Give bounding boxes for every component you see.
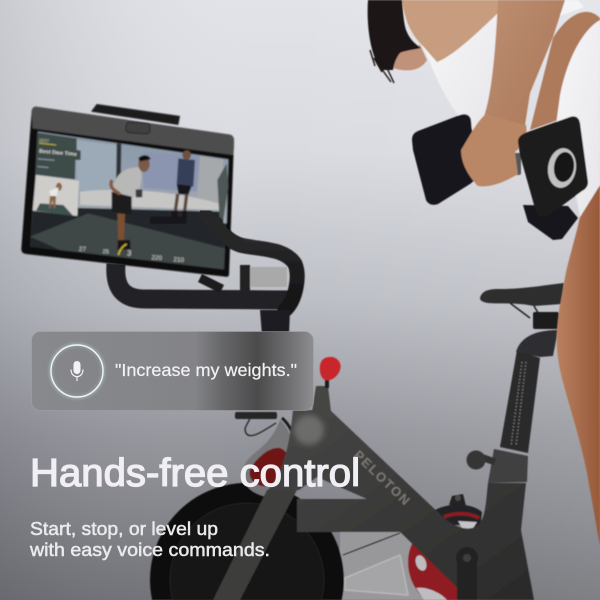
arm xyxy=(482,0,565,150)
hip skin xyxy=(530,12,600,130)
handlebar tip over tablet xyxy=(204,214,240,245)
head post and knob xyxy=(312,357,341,412)
front wheel xyxy=(150,483,344,600)
flywheel red section xyxy=(408,538,470,600)
camera button xyxy=(126,122,150,134)
left dumbbell head xyxy=(412,114,476,205)
metric: weight: 25 xyxy=(102,249,109,256)
tablet body xyxy=(21,107,234,277)
tablet xyxy=(21,104,234,277)
torso skin xyxy=(402,0,499,62)
fork xyxy=(213,484,300,600)
white top xyxy=(422,12,498,131)
studio walls xyxy=(34,132,228,223)
crank bolt xyxy=(456,547,478,600)
top shoulder strip xyxy=(560,0,584,16)
bike frame xyxy=(268,410,534,600)
tablet screen xyxy=(30,132,228,269)
microphone icon xyxy=(71,361,83,381)
metric: reps: 3 xyxy=(127,249,132,258)
workout dumbbells on floor xyxy=(150,217,187,224)
stats panel label: 1837 xyxy=(39,138,50,144)
microphone circle xyxy=(51,345,103,397)
fist xyxy=(461,114,527,186)
rear dumbbell head xyxy=(523,205,578,240)
stats panel title: Best Daw Time xyxy=(39,149,77,158)
hair xyxy=(368,0,421,83)
voice command panel xyxy=(32,332,314,410)
metric: time: 27 xyxy=(79,246,87,253)
form video thumbnail xyxy=(33,175,79,216)
highlight on head tube xyxy=(294,415,324,445)
metrics row xyxy=(79,246,185,264)
white shorts xyxy=(556,20,600,217)
stats panel xyxy=(35,133,81,179)
leg xyxy=(557,185,600,546)
tablet fabric top xyxy=(32,107,234,155)
right dumbbell head xyxy=(518,116,588,217)
frame brand text: PELOTON xyxy=(351,447,414,509)
voice command quote: "Increase my weights." xyxy=(115,360,297,380)
saddle xyxy=(480,283,564,329)
seat collar and knob xyxy=(466,449,528,483)
dumbbell handle xyxy=(510,153,521,175)
flywheel housing behind the frame xyxy=(340,494,482,600)
background person xyxy=(172,150,228,220)
dumbbell chrome end cap xyxy=(545,146,579,190)
tablet camera bar xyxy=(91,104,180,125)
subheading line 2: with easy voice commands. xyxy=(29,539,270,560)
brake housing xyxy=(235,412,298,498)
exercise bike xyxy=(150,283,564,600)
metric: total: 210 xyxy=(173,256,185,264)
rear wheel arch xyxy=(435,505,482,530)
subheading xyxy=(29,518,270,560)
subheading line 1: Start, stop, or level up xyxy=(30,518,218,539)
metric: output: 220 xyxy=(151,254,163,262)
headline: Hands-free control xyxy=(30,452,360,495)
neck skin xyxy=(393,45,427,70)
woman with dumbbell xyxy=(368,0,600,546)
handlebar xyxy=(116,216,297,335)
instructor xyxy=(111,155,151,249)
studio floor xyxy=(30,207,224,269)
seat post xyxy=(500,330,558,453)
